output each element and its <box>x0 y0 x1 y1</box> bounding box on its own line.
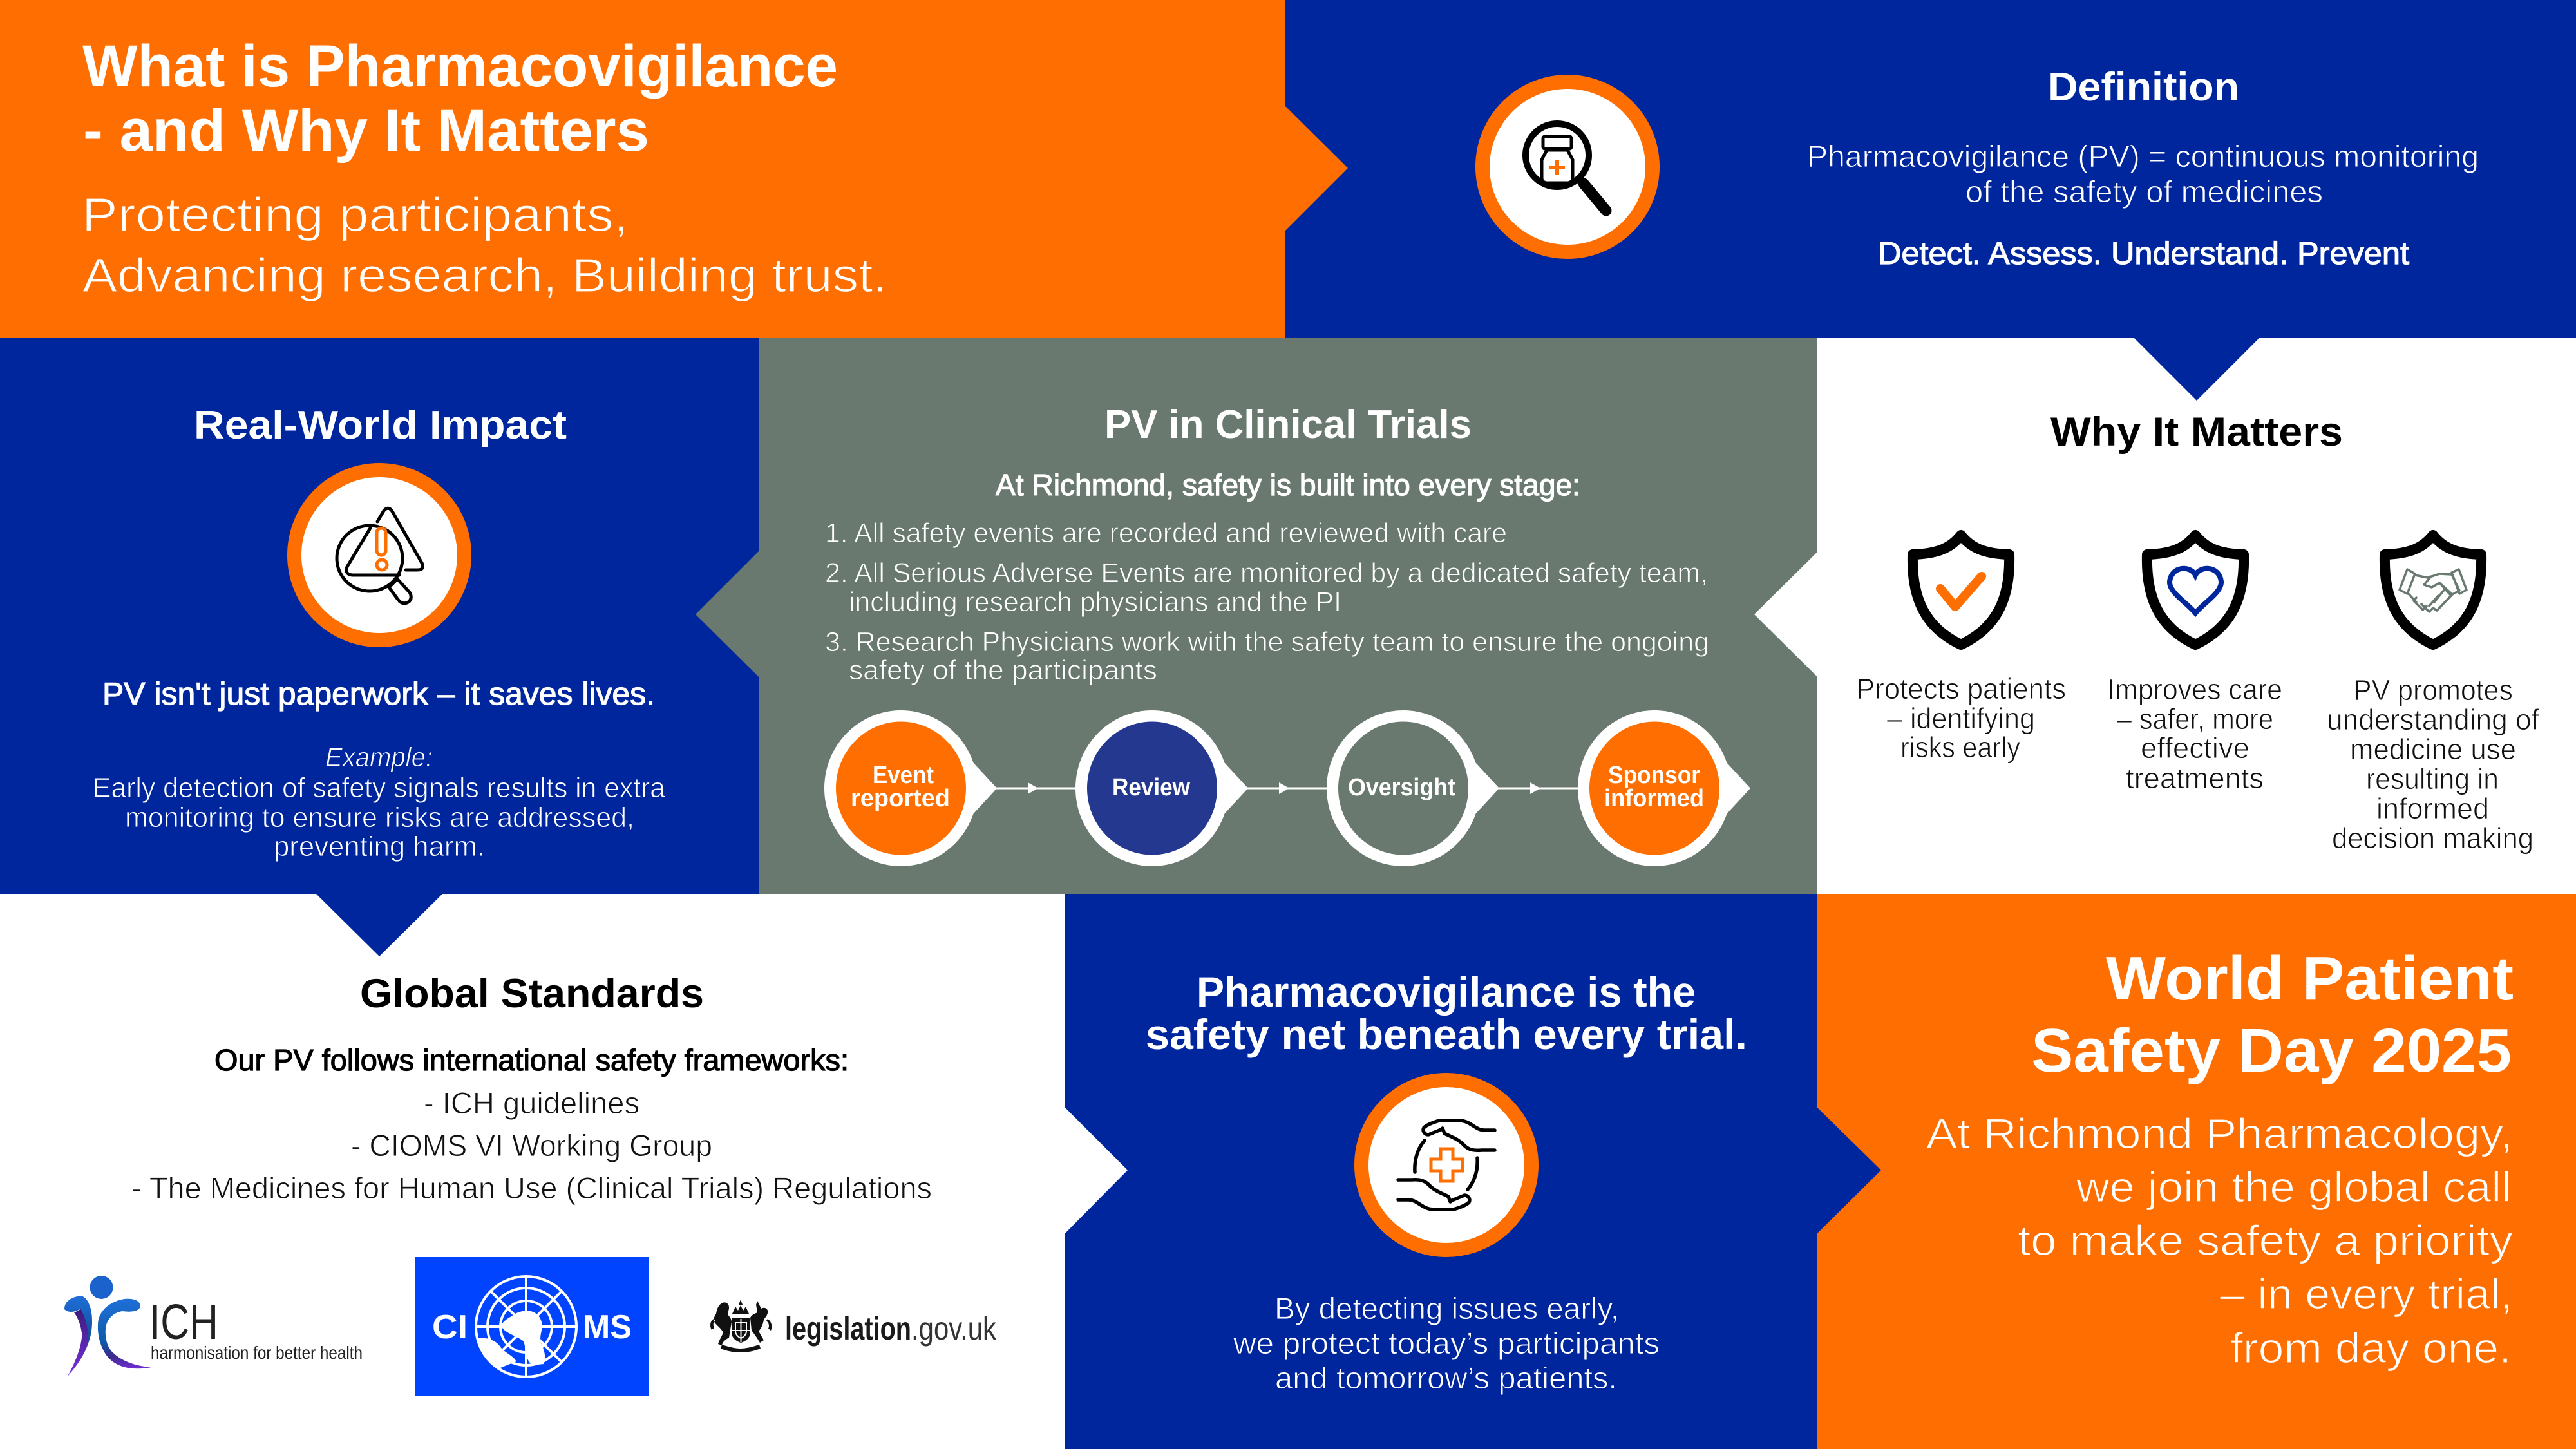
step: oversight <box>1327 710 1499 866</box>
list: safety steps: 1. All safety events are recorded and reviewed with care <box>825 518 1507 549</box>
flow diagram: event to sponsor <box>824 710 1750 866</box>
logo: ICH <box>64 1276 363 1376</box>
heading: safety net statement: Pharmacovigilance is the <box>1197 968 1696 1016</box>
icon: magnifier over medicine vial <box>1482 82 1653 252</box>
list: safety steps: 2. All Serious Adverse Events are monitored by a dedicated safety team, <box>825 558 1708 589</box>
text: promotes understanding description: PV promotes <box>2353 674 2513 706</box>
text block: example <box>93 742 666 862</box>
list: safety steps: 3. Research Physicians work with the safety team to ensure the ongoing <box>825 627 1709 658</box>
list: frameworks <box>131 1086 932 1205</box>
step: event reported: Event <box>873 762 934 789</box>
item: improves care <box>2107 535 2282 795</box>
heading: safety net statement <box>1146 968 1747 1058</box>
list: frameworks: - The Medicines for Human Use (Clinical Trials) Regulations <box>131 1171 932 1205</box>
heading: definition: Definition <box>2048 65 2239 109</box>
list: safety steps: including research physicians and the PI <box>849 587 1341 618</box>
item: promotes understanding <box>2327 535 2539 855</box>
panel: PV in clinical trials <box>696 338 1817 894</box>
logo: CIOMS: CI <box>432 1309 468 1346</box>
subtitle <box>82 188 887 302</box>
item: protects patients <box>1856 535 2066 764</box>
text: improves care description: effective <box>2141 732 2249 764</box>
heading: PV in clinical trials: PV in Clinical Trials <box>1104 402 1472 447</box>
icon: hands protecting medical cross <box>1361 1080 1531 1250</box>
subtitle: Protecting participants, <box>82 188 629 242</box>
text block: definition statement: Pharmacovigilance (PV) = continuous monitoring <box>1807 139 2479 173</box>
panel: world patient safety day <box>1817 894 2576 1449</box>
text block: frameworks intro: Our PV follows international safety frameworks: <box>214 1043 849 1077</box>
step: oversight: Oversight <box>1348 774 1455 801</box>
title: - and Why It Matters <box>83 98 649 164</box>
text block: safety net detail: we protect today’s participants <box>1233 1326 1660 1360</box>
heading: world patient safety day 2025: Safety Day 2025 <box>2031 1016 2512 1085</box>
panel: definition <box>1285 0 2576 401</box>
logo: CIOMS <box>415 1257 649 1396</box>
icon: warning triangle with magnifier <box>294 470 464 640</box>
text: improves care description: – safer, more <box>2117 703 2273 735</box>
step: event reported <box>824 710 997 866</box>
icon: shield with check <box>1913 535 2009 645</box>
text block: richmond statement: At Richmond Pharmacology, <box>1926 1110 2513 1157</box>
icon: shield with heart <box>2147 535 2244 645</box>
text block: example: preventing harm. <box>274 831 485 862</box>
icon: shield with handshake <box>2385 535 2481 645</box>
step: sponsor informed: informed <box>1604 785 1704 812</box>
heading: world patient safety day 2025: World Patient <box>2106 944 2514 1013</box>
list: safety steps <box>825 518 1709 686</box>
logo: legislation.gov.uk <box>710 1300 997 1352</box>
text block: safety net detail: By detecting issues early, <box>1274 1291 1619 1325</box>
text: promotes understanding description: understanding of <box>2327 703 2539 736</box>
text: promotes understanding description: resulting in <box>2366 762 2499 795</box>
logo: CIOMS: MS <box>583 1309 632 1346</box>
text block: richmond statement: from day one. <box>2230 1324 2512 1372</box>
panel: global standards <box>0 894 1128 1449</box>
text: improves care description <box>2107 673 2282 795</box>
text: promotes understanding description <box>2327 674 2539 855</box>
title <box>82 33 838 164</box>
heading: world patient safety day 2025 <box>2031 944 2514 1085</box>
text: protects patients description: risks early <box>1900 731 2020 764</box>
list: safety steps: safety of the participants <box>849 655 1157 686</box>
list: frameworks: - ICH guidelines <box>424 1086 639 1120</box>
logo: ICH: ICH <box>149 1294 218 1350</box>
text: promotes understanding description: decision making <box>2332 822 2533 855</box>
text block: richmond statement <box>1926 1110 2513 1372</box>
text: improves care description: Improves care <box>2107 673 2282 706</box>
text block: richmond statement: we join the global call <box>2076 1163 2512 1211</box>
text block: definition statement: of the safety of medicines <box>1965 175 2323 209</box>
text: protects patients description <box>1856 672 2066 764</box>
panel: title <box>0 0 1348 338</box>
heading: safety net statement: safety net beneath every trial. <box>1146 1010 1747 1058</box>
text: protects patients description: – identifying <box>1887 702 2035 735</box>
panel: why it matters <box>1754 338 2576 894</box>
text block: example: Example: <box>325 742 433 772</box>
subtitle: Advancing research, Building trust. <box>82 249 887 302</box>
heading: global standards: Global Standards <box>360 971 704 1016</box>
logo: ICH: harmonisation for better health <box>151 1343 363 1363</box>
text block: richmond intro: At Richmond, safety is built into every stage: <box>996 468 1580 502</box>
step: sponsor informed: Sponsor <box>1608 762 1700 789</box>
logo: legislation.gov.uk: .gov.uk <box>911 1311 997 1347</box>
panel: safety net <box>1065 894 1881 1449</box>
text block: example: Early detection of safety signals results in extra <box>93 772 666 804</box>
text block: example: monitoring to ensure risks are addressed, <box>125 802 634 833</box>
logo: legislation.gov.uk: legislation <box>785 1311 911 1347</box>
text block: richmond statement: to make safety a priority <box>2018 1217 2513 1264</box>
text block: safety net detail: and tomorrow’s patients. <box>1275 1361 1617 1395</box>
step: review: Review <box>1112 774 1190 801</box>
text block: key message: PV isn't just paperwork – it saves lives. <box>102 677 655 712</box>
step: event reported: reported <box>851 785 950 812</box>
text: improves care description: treatments <box>2126 762 2264 795</box>
text block: definition statement <box>1807 139 2479 209</box>
text: protects patients description: Protects patients <box>1856 672 2066 705</box>
text: promotes understanding description: informed <box>2376 792 2489 825</box>
text block: detect assess understand prevent: Detect. Assess. Understand. Prevent <box>1878 236 2409 271</box>
text block: richmond statement: – in every trial, <box>2220 1270 2513 1318</box>
list: frameworks: - CIOMS VI Working Group <box>351 1128 712 1162</box>
step: review <box>1075 710 1248 866</box>
step: sponsor informed <box>1578 710 1750 866</box>
heading: why it matters: Why It Matters <box>2050 410 2343 455</box>
heading: real-world impact: Real-World Impact <box>194 403 567 448</box>
panel: real-world impact <box>0 338 759 956</box>
flow connectors <box>995 782 1580 794</box>
text: promotes understanding description: medicine use <box>2350 733 2516 766</box>
text block: safety net detail <box>1233 1291 1660 1395</box>
title: What is Pharmacovigilance <box>82 33 838 99</box>
